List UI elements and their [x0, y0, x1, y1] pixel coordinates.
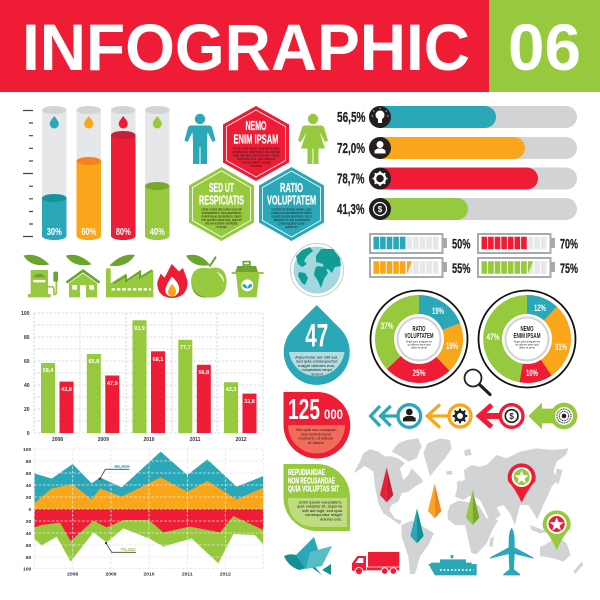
icon: bird	[284, 537, 332, 575]
bar chart y axis: 20	[24, 407, 30, 413]
marker: orange	[428, 483, 441, 518]
icon: airplane	[490, 528, 533, 575]
area chart x axis	[67, 571, 231, 577]
battery 70%: 70%	[560, 236, 578, 252]
hexagon: nemo enim ipsam: voluptatem sequi	[241, 160, 271, 164]
bars 2012: 42,3	[226, 387, 236, 393]
hexagon: nemo enim ipsam: ENIM IPSAM	[234, 132, 278, 146]
hexagon: sed ut respiciatis: SED UT	[209, 180, 234, 195]
hexagon: sed ut respiciatis: Unde omnis iste natus error sit	[202, 208, 242, 212]
callout 66,999: 66,999	[114, 464, 130, 470]
eco icons row	[23, 255, 264, 298]
hexagon: sed ut respiciatis: RESPICIATIS	[199, 192, 244, 208]
bars 2010: 2010	[143, 437, 155, 443]
pie chart: ratio voluptatem: 25%	[412, 368, 426, 378]
leaf badge: repudiandae: consequuntur magni	[305, 513, 342, 517]
callout 75,342: 75,342	[120, 547, 136, 553]
pie chart: nemo enim ipsam: 12%	[534, 303, 546, 313]
bar chart y axis: 100	[21, 311, 30, 317]
bar 72,0%: 72,0%	[337, 141, 365, 157]
tube green 40%: 40%	[150, 227, 165, 238]
pie chart: nemo enim ipsam	[478, 290, 576, 388]
bars 2008: 42,8	[61, 387, 72, 393]
arrow: orange	[427, 404, 471, 428]
bars 2011	[178, 340, 211, 443]
badge: 125 000: incidunt, ut labore	[298, 437, 334, 441]
badge: 125 000: et dolore	[308, 441, 324, 445]
icon: ship	[428, 555, 477, 575]
bars 2008	[41, 363, 74, 443]
pie chart: nemo enim ipsam: qui dolorem ipsum quia	[516, 344, 539, 346]
bars 2011: 56,8	[198, 370, 209, 376]
area chart y axis	[23, 447, 32, 573]
area chart	[23, 447, 263, 577]
hexagon: nemo enim ipsam	[223, 106, 289, 181]
bar chart y axis: 0	[27, 431, 30, 437]
pie chart: nemo enim ipsam: 31%	[555, 342, 567, 352]
area chart x axis: 2009	[105, 571, 117, 577]
badge: 125 000: eius modi tempora	[301, 432, 331, 436]
hexagon: sed ut respiciatis: et quasi	[216, 225, 227, 229]
bars 2012	[224, 382, 256, 443]
hexagon: ratio voluptatem: RATIO	[280, 180, 303, 195]
bar 41,3%: $	[378, 205, 383, 214]
hexagon: sed ut respiciatis: voluptatem accusantium	[202, 211, 242, 215]
hexagon: nemo enim ipsam: NEMO	[246, 118, 266, 133]
area chart y axis: 100	[23, 447, 32, 453]
tube red 80%	[111, 106, 136, 240]
area chart y axis: 80	[26, 459, 32, 465]
battery 50%	[370, 234, 471, 253]
pin: red star	[508, 463, 536, 503]
pie chart: nemo enim ipsam: 47%	[486, 332, 500, 342]
badge: 125 000: Sed quia non numquam	[296, 428, 336, 432]
bar 78,7%: 78,7%	[337, 172, 365, 188]
marker: red	[380, 467, 393, 502]
title: INFOGRAPHIC	[22, 10, 470, 84]
hexagon: ratio voluptatem: Ut enim ad minima veniam, quis	[272, 208, 312, 212]
hexagon: ratio voluptatem	[259, 167, 324, 241]
icon: globe	[290, 244, 344, 296]
hexagon: nemo enim ipsam: dolores eos qui ratione	[237, 157, 275, 161]
leaf badge: repudiandae: odit aut fugit, sed quia	[302, 509, 342, 513]
pie chart: ratio voluptatem: VOLUPTATEM	[404, 333, 434, 340]
callout 75,342	[105, 542, 136, 553]
area chart x axis: 2010	[143, 571, 155, 577]
bar 56,5%: 56,5%	[337, 110, 366, 126]
hexagon: ratio voluptatem: autem vel	[286, 225, 298, 229]
drop: 47: Aspernatur aut odit aut,	[295, 356, 338, 360]
bar chart y axis: 60	[24, 359, 30, 365]
pie chart: nemo enim ipsam: Neque porro quisquam est	[514, 340, 540, 344]
marker: green	[466, 490, 479, 525]
icon: fuel pump	[23, 255, 58, 297]
bar 72,0%	[337, 137, 577, 159]
hexagon: sed ut respiciatis: rem aperiam eaque ipsa, quae ab	[202, 218, 242, 222]
icon: man	[184, 114, 216, 164]
progress bars	[337, 106, 577, 220]
icon: truck	[352, 552, 399, 575]
pie chart: ratio voluptatem: 19%	[446, 341, 458, 351]
area: red	[34, 509, 263, 541]
bar 78,7%	[337, 168, 577, 190]
pie chart: ratio voluptatem: Neque porro quisquam est	[406, 340, 432, 344]
area chart y axis: 20	[26, 519, 32, 525]
pin: green star	[543, 510, 571, 550]
batteries	[370, 234, 578, 277]
hexagon: ratio voluptatem: aliquid ex ea commodi	[274, 218, 310, 222]
tube teal 30%	[42, 106, 66, 240]
bars 2011: 2011	[190, 437, 201, 443]
marker: teal	[410, 508, 424, 543]
header banner	[0, 0, 600, 92]
hexagon: nemo enim ipsam: nesciunt	[250, 164, 262, 168]
tube chart	[23, 106, 170, 240]
callout 66,999	[99, 464, 130, 480]
battery 50%: 50%	[452, 236, 471, 252]
leaf badge: repudiandae: dolores eos.	[320, 517, 342, 521]
hexagon: sed ut respiciatis: doloremque laudantium, totam	[202, 214, 242, 218]
bar chart y axis: 80	[24, 335, 30, 341]
world map	[352, 438, 583, 575]
drop: 47: voluptatem sequi	[302, 368, 332, 372]
arrow: green	[528, 403, 577, 429]
badge: 125 000: 000	[324, 406, 343, 422]
icon: recycle bin	[232, 262, 264, 297]
bars 2012: 32,8	[244, 399, 255, 405]
area chart x axis: 2012	[220, 571, 231, 577]
hexagon: nemo enim ipsam: voluptas sit, aspernatur aut odit aut	[232, 150, 280, 154]
pie chart: nemo enim ipsam: ENIM IPSAM	[514, 333, 541, 340]
leaf badge: repudiandae: NON RECUSANDAE	[288, 475, 335, 485]
pie chart: nemo enim ipsam: NEMO	[520, 326, 534, 333]
bar 56,5%	[337, 106, 577, 128]
area chart y axis: 60	[26, 543, 32, 549]
hexagon: ratio voluptatem: consequatur quis	[278, 222, 305, 226]
bars 2010: 68,1	[153, 357, 163, 363]
battery 55%	[370, 258, 471, 277]
pie chart: ratio voluptatem: RATIO	[412, 326, 426, 333]
bars 2009: 2009	[98, 437, 109, 443]
leaf badge: repudiandae	[283, 464, 350, 531]
bar chart grid	[34, 313, 263, 433]
icon: factory	[106, 255, 153, 297]
hexagon: ratio voluptatem: VOLUPTATEM	[267, 192, 316, 208]
leaf badge: repudiandae: QUIA VOLUPTAS SIT	[288, 484, 339, 494]
bars 2011: 77,7	[180, 345, 191, 351]
arrow: red: $	[509, 412, 514, 421]
area chart x axis: 2011	[182, 571, 193, 577]
tube green 40%	[145, 106, 170, 240]
badge: 125 000: 125	[288, 394, 320, 426]
area chart y axis: 40	[26, 531, 32, 537]
leaf badge: repudiandae: Enim ipsam voluptatem,	[299, 500, 342, 504]
drop: 47: magni dolores eos,	[298, 364, 335, 368]
pie chart: nemo enim ipsam: dolor sit amet	[519, 346, 535, 350]
bar chart	[21, 311, 263, 443]
hexagon: sed ut respiciatis: illo inventore veritatis	[206, 222, 238, 226]
arrow: teal	[371, 405, 421, 427]
area chart x axis: 2008	[67, 571, 78, 577]
area chart y axis: 0	[29, 507, 32, 513]
area chart y axis: 80	[26, 555, 32, 561]
pie chart: ratio voluptatem: 19%	[432, 306, 444, 316]
battery 55%: 55%	[452, 260, 471, 276]
area: orange	[34, 477, 263, 509]
battery 70%	[478, 234, 578, 253]
hexagon: sed ut respiciatis	[189, 167, 254, 241]
arrow: red	[479, 405, 523, 427]
drop: 47: nesciunt	[311, 372, 323, 376]
bar 41,3%	[337, 198, 577, 220]
battery 75%: 75%	[560, 260, 578, 276]
icon: magnifier	[464, 370, 490, 394]
bars 2009	[87, 354, 119, 443]
icon: flame	[157, 264, 188, 298]
bars 2008: 58,4	[43, 368, 54, 374]
pie chart: ratio voluptatem: dolor sit amet	[411, 346, 427, 350]
area chart y axis: 60	[26, 471, 32, 477]
area: teal	[34, 452, 263, 509]
drop: 47: 47	[305, 318, 328, 354]
bars 2008: 2008	[52, 437, 63, 443]
pie chart: nemo enim ipsam: 10%	[526, 368, 538, 378]
leaf badge: repudiandae: quia voluptas sit, asperna	[297, 505, 342, 509]
area chart y axis: 100	[23, 567, 32, 573]
badge: 125 000	[284, 392, 350, 458]
bar 41,3%: 41,3%	[337, 202, 365, 218]
bars 2012: 2012	[235, 437, 247, 443]
pie chart: ratio voluptatem: qui dolorem ipsum quia	[408, 344, 431, 346]
hexagon: ratio voluptatem: nostrum exercitationem ullam	[272, 211, 312, 215]
bars 2010: 93,9	[134, 326, 145, 332]
area chart y axis: 40	[26, 483, 32, 489]
bar chart y axis	[21, 311, 30, 437]
tube teal 30%: 30%	[47, 227, 62, 238]
issue number: 06	[508, 10, 581, 84]
area: green	[34, 509, 263, 563]
hexagon: nemo enim ipsam: fugit, sed quia consequuntur magni	[233, 154, 279, 158]
arrows row	[371, 403, 577, 429]
map continents	[353, 438, 583, 574]
icon: apple	[186, 255, 227, 298]
leaf badge: repudiandae: REPUDIANDAE	[288, 467, 325, 477]
tube orange 60%	[76, 106, 101, 240]
battery 75%	[478, 258, 578, 277]
bar chart y axis: 40	[24, 383, 30, 389]
hexagon: nemo enim ipsam: Nemo enim ipsam voluptatem quia	[233, 146, 279, 150]
drop: 47	[284, 305, 350, 385]
bars 2009: 47,9	[107, 381, 118, 387]
area chart y axis: 20	[26, 495, 32, 501]
icon: house	[66, 255, 100, 297]
hexagon: ratio voluptatem: corporis suscipit laboriosam, nisi ut	[272, 214, 312, 218]
tube orange 60%: 60%	[81, 227, 96, 238]
drop: 47: sed quia consequuntur	[296, 360, 338, 364]
bars 2009: 65,8	[88, 359, 99, 365]
pie chart: ratio voluptatem: 37%	[380, 321, 394, 331]
icon: woman	[298, 114, 328, 164]
tube red 80%: 80%	[116, 227, 131, 238]
pie chart: ratio voluptatem	[370, 290, 468, 388]
bars 2010	[132, 320, 165, 443]
scale ticks	[23, 110, 33, 236]
